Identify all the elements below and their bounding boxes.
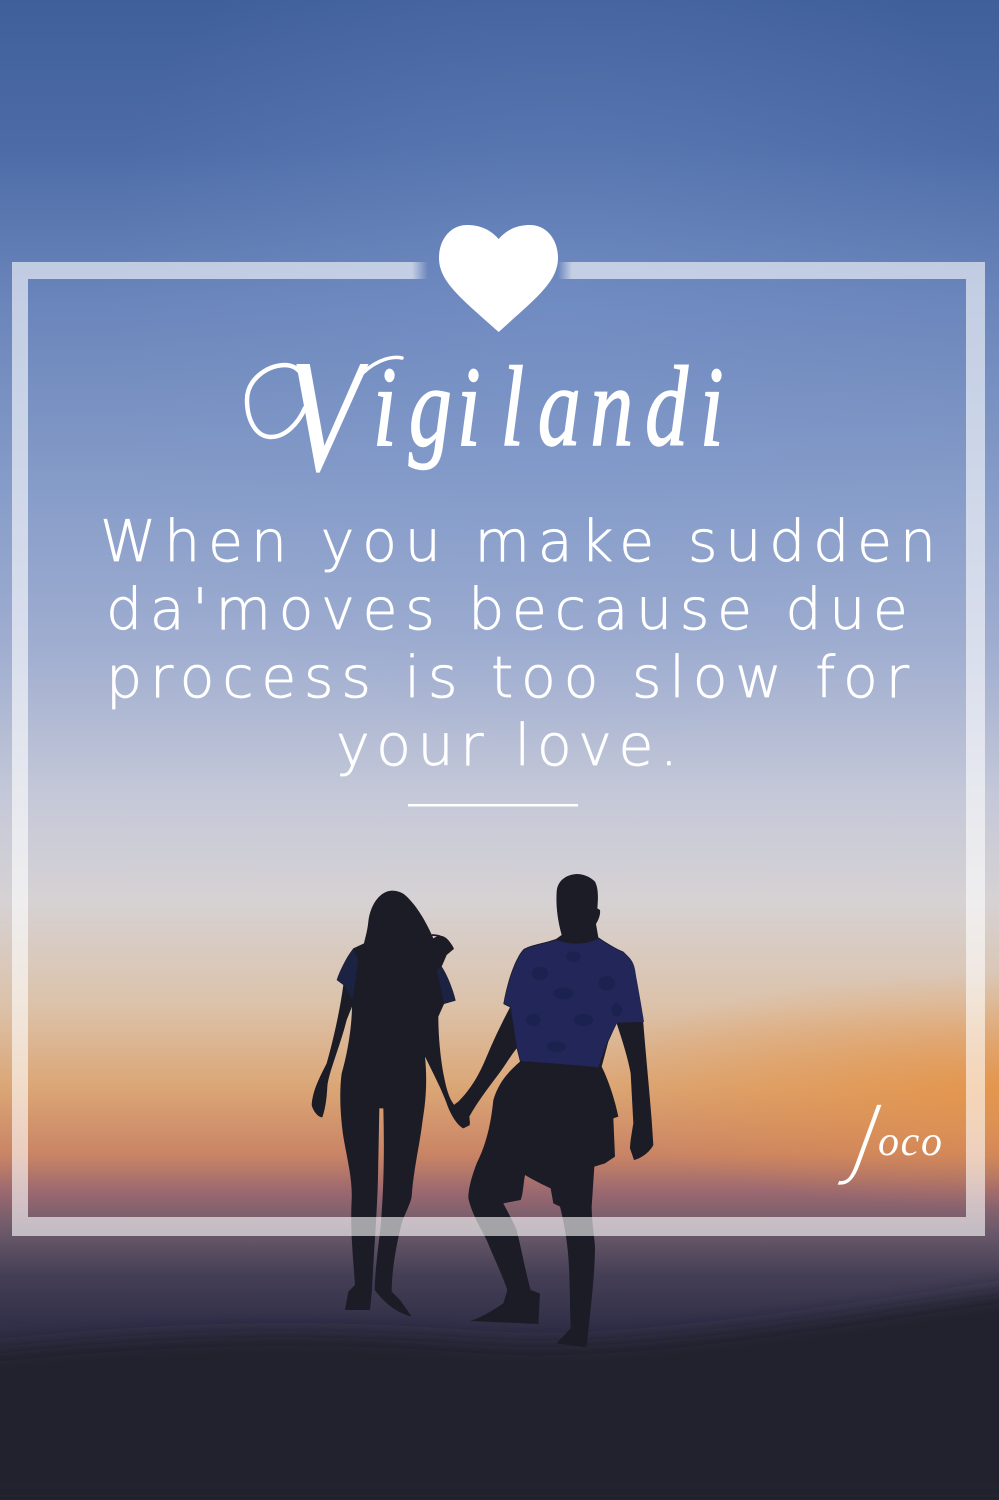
man silhouette — [451, 874, 653, 1347]
signature — [835, 1089, 942, 1190]
quote text: your love. — [336, 713, 678, 779]
white square frame — [12, 262, 985, 1236]
man shirt pattern — [526, 951, 622, 1052]
title — [244, 356, 722, 473]
quote text: process is too slow for — [106, 645, 910, 711]
hair strands — [432, 935, 453, 960]
woman shirt tint — [337, 949, 455, 1003]
quote text — [100, 509, 936, 779]
title: V — [280, 315, 380, 509]
distant hills and dark ground — [0, 1292, 999, 1500]
icon: heart — [439, 225, 558, 332]
signature: J — [835, 1089, 898, 1190]
couple silhouette holding hands — [312, 874, 653, 1347]
title: igilandi — [373, 342, 724, 470]
signature: oco — [878, 1119, 942, 1165]
divider under quote — [408, 804, 578, 806]
quote text: da'moves because due — [106, 577, 908, 643]
woman silhouette — [312, 891, 470, 1317]
man shirt tint — [504, 938, 644, 1067]
quote text: When you make sudden — [100, 509, 936, 575]
